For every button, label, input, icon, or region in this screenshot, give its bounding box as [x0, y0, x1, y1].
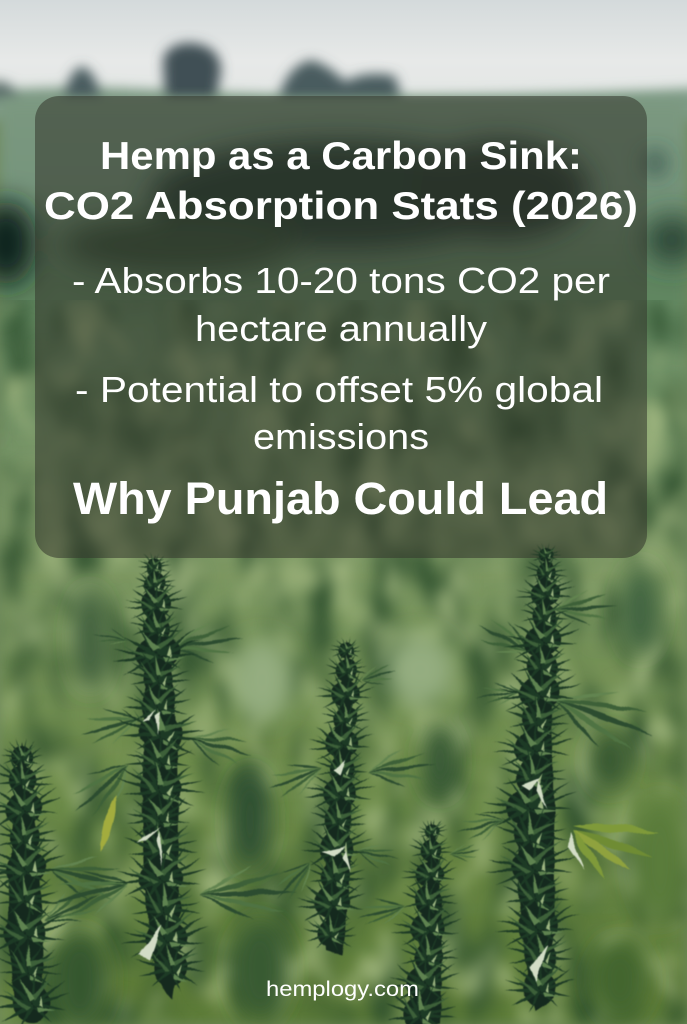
title: CO2 Absorption Stats (2026)	[44, 185, 638, 228]
stat: absorption per hectare	[72, 260, 610, 349]
hemp plant: left main cola	[45, 552, 299, 1000]
stat: emissions offset: - Potential to offset 5% global	[75, 369, 603, 410]
stat: emissions offset	[75, 369, 603, 457]
subheading: Why Punjab Could Lead	[73, 473, 608, 524]
stat: absorption per hectare: hectare annually	[195, 308, 487, 349]
hemp plant: small front cola	[353, 818, 481, 1024]
sky background	[0, 0, 687, 110]
translucent text panel	[35, 96, 647, 558]
title: Hemp as a Carbon Sink:	[100, 135, 582, 178]
footer website credit: hemplogy.com	[266, 978, 419, 1001]
hemp plant: right main cola	[453, 542, 664, 1015]
hemp plant: far left	[0, 738, 133, 1024]
title	[44, 135, 638, 228]
stat: absorption per hectare: - Absorbs 10-20 tons CO2 per	[72, 260, 610, 301]
stat: emissions offset: emissions	[253, 416, 429, 457]
hemp plant: centre cola	[262, 637, 438, 955]
